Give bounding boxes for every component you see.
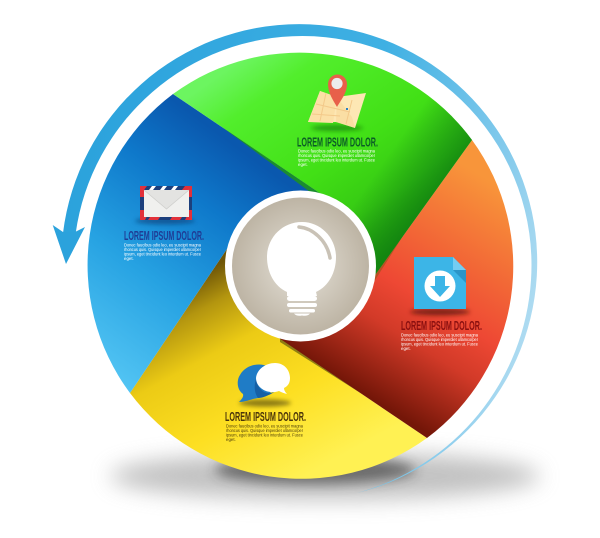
icon: light bulb (267, 222, 336, 316)
text block: blue (124, 242, 201, 261)
text block: yellow (226, 424, 303, 442)
circular arrow (53, 24, 537, 493)
text block: blue: eget. (124, 256, 134, 261)
text block: blue: rhoncus quis. Quisque imperdiet ullamcorper (124, 247, 201, 252)
text block: green: ipsum, eget tincidunt leo interdum ut. Fusce (298, 158, 375, 162)
heading: yellow: LOREM IPSUM DOLOR. (225, 410, 306, 424)
ground shadow (110, 452, 540, 500)
icon: speech bubbles (238, 363, 291, 407)
text block: yellow: Donec faucibus odio leo, eu suscipit magna (226, 424, 303, 428)
icon: airmail envelope (135, 186, 195, 224)
text block: red: eget. (401, 346, 411, 351)
panel: yellow segment (130, 237, 427, 479)
text block: green: eget. (298, 162, 308, 167)
icon: download document (410, 257, 470, 315)
text block: yellow: ipsum, eget tincidunt leo interdum ut. Fusce (226, 432, 303, 438)
text block: green: Donec faucibus odio leo, eu suscipit magna (298, 148, 375, 154)
text block: blue: Donec faucibus odio leo, eu suscipit magna (124, 242, 201, 248)
text block: red: rhoncus quis. Quisque imperdiet ullamcorper (401, 337, 478, 342)
panel: blue segment (88, 94, 330, 393)
heading: blue: LOREM IPSUM DOLOR. (124, 229, 204, 243)
heading: green: LOREM IPSUM DOLOR. (297, 136, 378, 150)
text block: yellow: rhoncus quis. Quisque imperdiet ullamcorper (226, 428, 303, 433)
panel: red segment (270, 140, 513, 438)
icon: map with pin (308, 74, 366, 131)
text block: blue: ipsum, eget tincidunt leo interdum ut. Fusce (124, 252, 201, 256)
heading: red: LOREM IPSUM DOLOR. (401, 319, 482, 333)
text block: green: rhoncus quis. Quisque imperdiet ullamcorper (298, 153, 375, 158)
text block: yellow: eget. (226, 437, 236, 442)
text block: red: ipsum, eget tincidunt leo interdum ut. Fusce (401, 342, 478, 346)
panel: green segment (173, 53, 472, 289)
text block: red: Donec faucibus odio leo, eu suscipit magna (401, 332, 478, 338)
center hub (225, 190, 376, 342)
text block: green (298, 148, 375, 167)
text block: red (401, 332, 478, 351)
